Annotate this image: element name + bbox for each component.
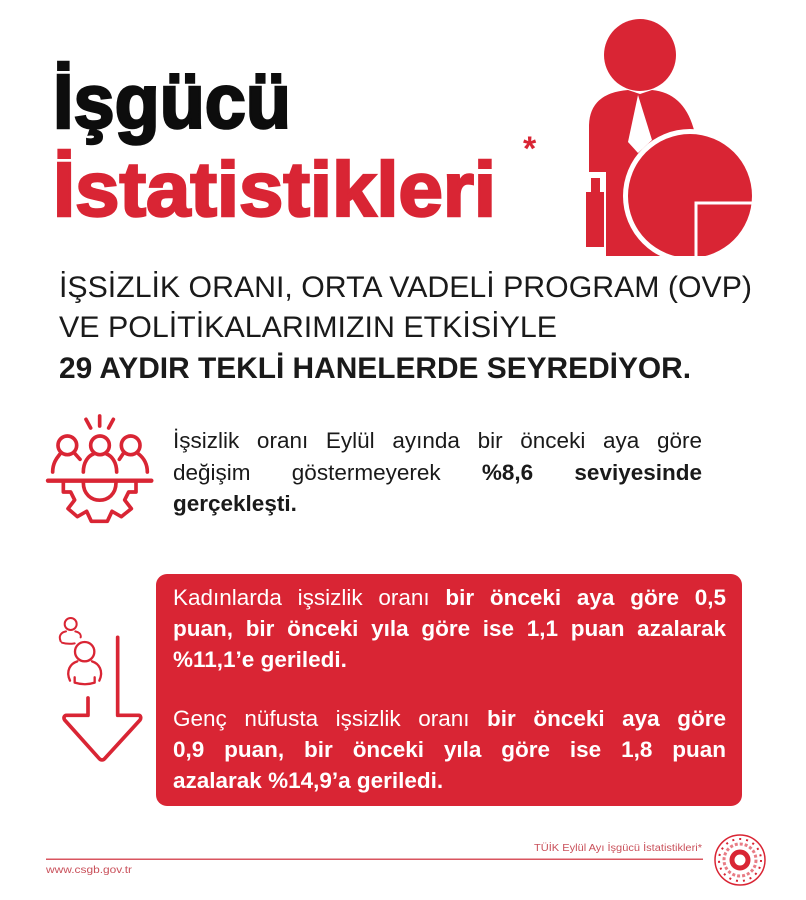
text block: women unemployment: %11,1’e geriledi. <box>173 647 347 672</box>
headline: VE POLİTİKALARIMIZIN ETKİSİYLE <box>59 311 557 344</box>
text block: women unemployment <box>173 585 726 672</box>
footer: www.csgb.gov.tr <box>45 864 133 876</box>
text block: unemployment rate: değişim göstermeyerek %8,6 seviyesinde <box>173 460 702 485</box>
text block: youth unemployment: azalarak %14,9’a geriledi. <box>173 768 443 793</box>
text block: unemployment rate <box>173 428 702 516</box>
icon: people and down arrow <box>58 617 143 762</box>
text block: women unemployment: puan, bir önceki yıla göre ise 1,1 puan azalarak <box>173 616 726 641</box>
headline: İŞSİZLİK ORANI, ORTA VADELİ PROGRAM (OVP) <box>59 271 752 304</box>
text block: unemployment rate: İşsizlik oranı Eylül ayında bir önceki aya göre <box>173 428 702 453</box>
text block: youth unemployment: Genç nüfusta işsizlik oranı bir önceki aya göre <box>173 706 726 731</box>
footer: TÜİK Eylül Ayı İşgücü İstatistikleri* <box>534 841 702 854</box>
panel: red callout <box>156 574 742 806</box>
text block: unemployment rate: gerçekleşti. <box>173 491 297 516</box>
title <box>53 59 537 233</box>
headline: 29 AYDIR TEKLİ HANELERDE SEYREDİYOR. <box>59 352 691 385</box>
icon: team and gear <box>46 414 154 524</box>
title: İşgücü <box>53 59 291 145</box>
title: İstatistikleri <box>53 147 496 233</box>
icon: businessman with pie chart <box>586 19 752 256</box>
text block: youth unemployment: 0,9 puan, bir önceki yıla göre ise 1,8 puan <box>173 737 726 762</box>
title: * <box>523 130 537 168</box>
icon: ministry seal <box>715 835 765 885</box>
text block: women unemployment: Kadınlarda işsizlik oranı bir önceki aya göre 0,5 <box>173 585 726 610</box>
headline <box>59 271 752 385</box>
